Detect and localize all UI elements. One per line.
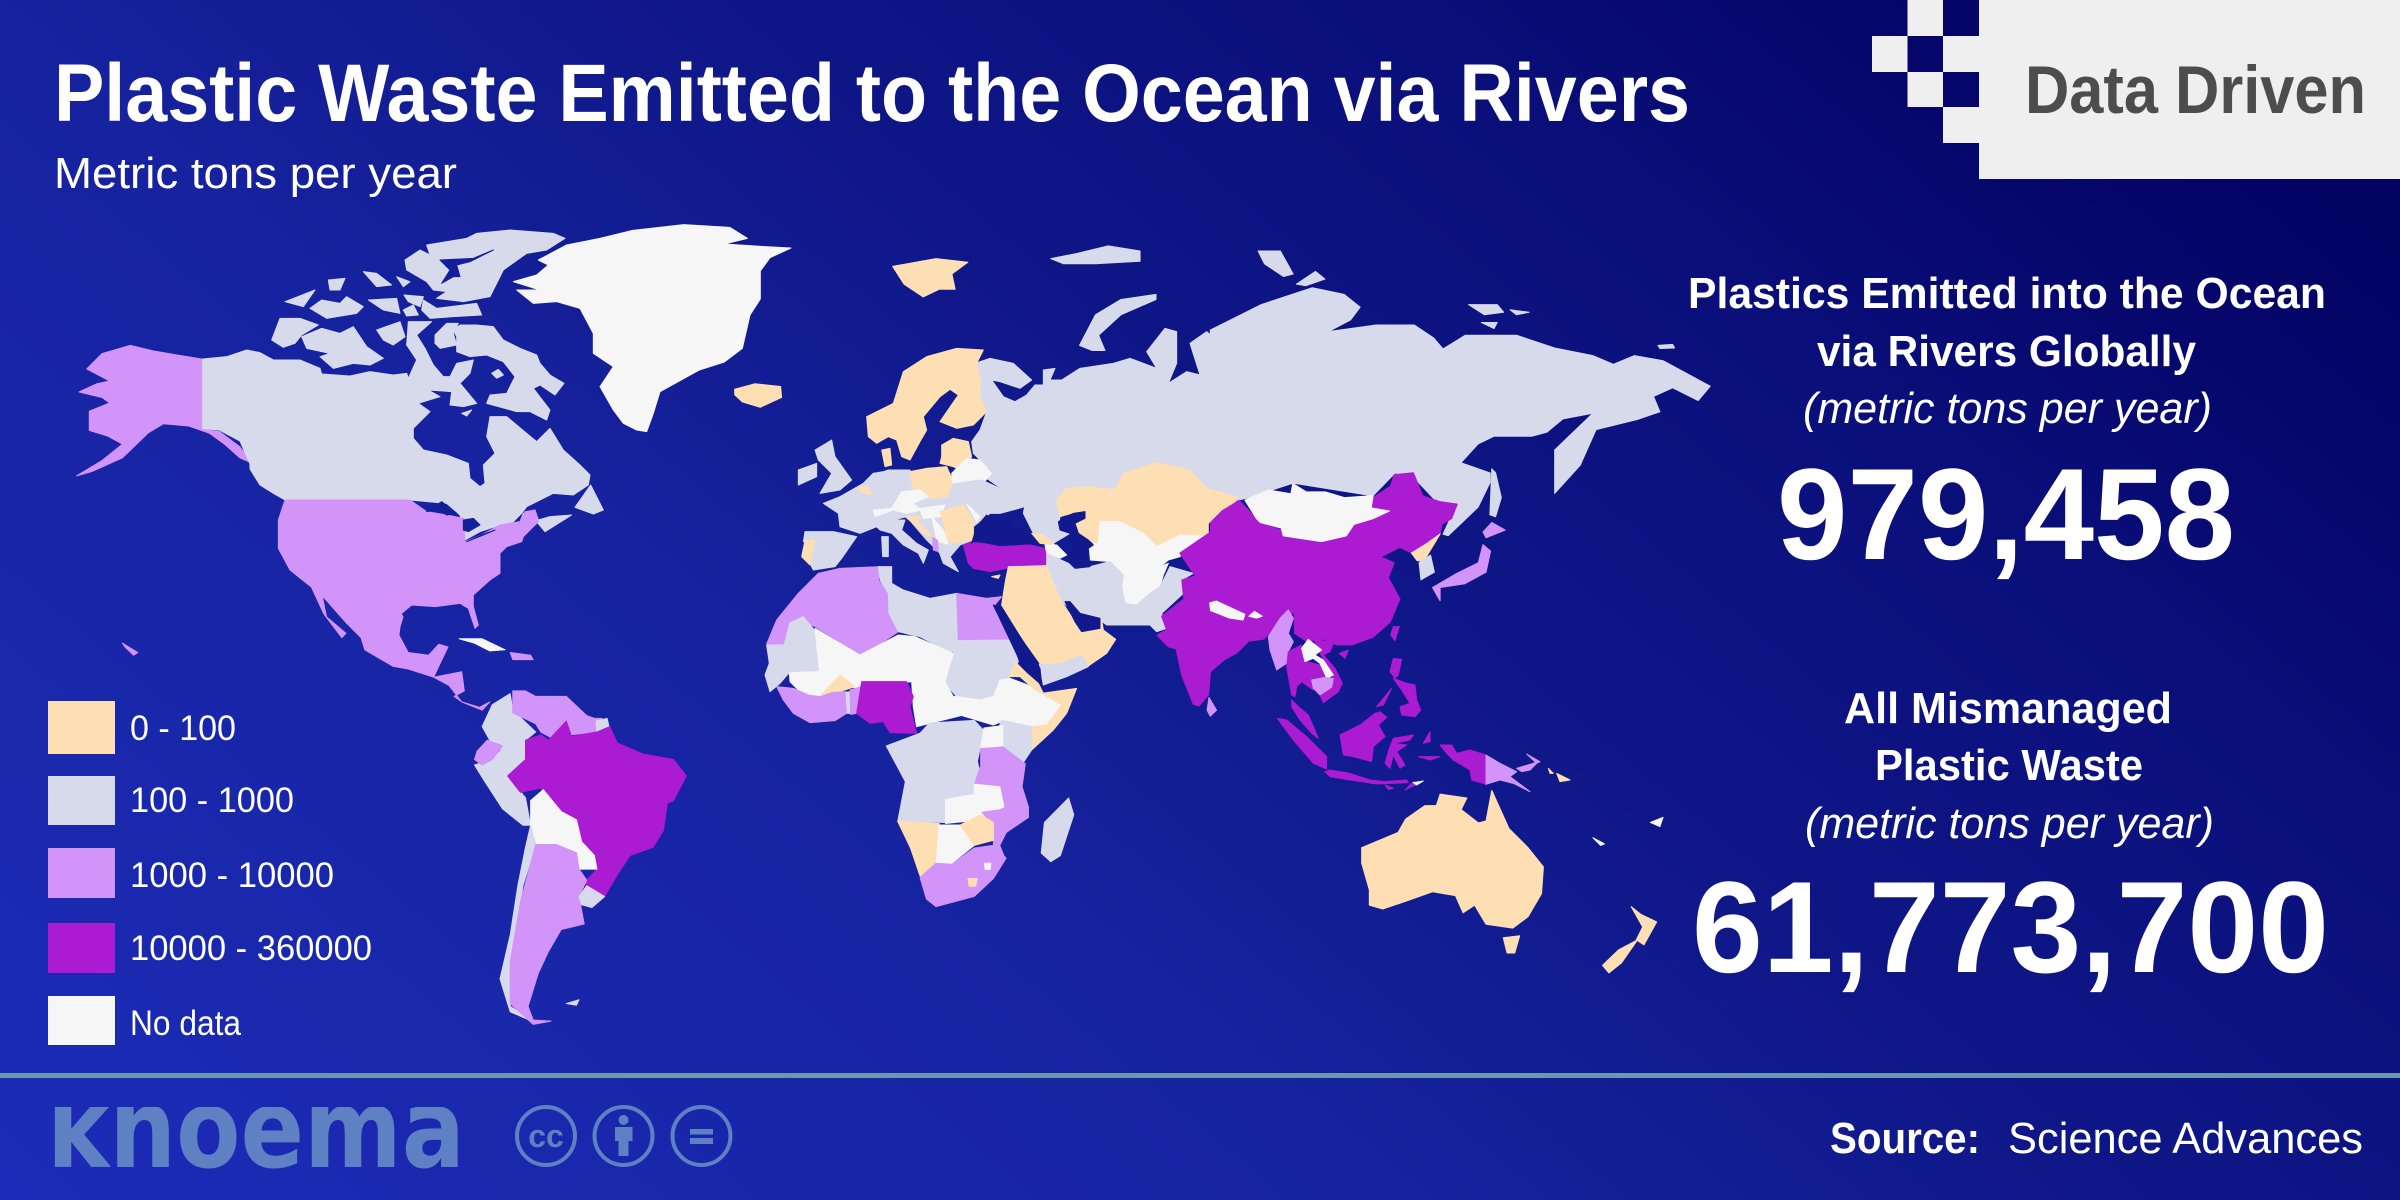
logo: knoema: knoema [47, 1065, 465, 1193]
stat block: plastics emitted via rivers: Plastics Emitted into the Ocean [1688, 269, 2326, 318]
map: East and South Asia and Australia [1157, 469, 1543, 953]
source credit: Science Advances [2008, 1114, 2363, 1163]
legend item: 100 - 1000 [48, 776, 294, 825]
stat block: plastics emitted via rivers: (metric tons per year) [1803, 384, 2212, 433]
brand tab: Data Driven: Data Driven [2025, 52, 2366, 128]
stat block: all mismanaged plastic waste: (metric tons per year) [1805, 799, 2214, 848]
legend item: 1000 - 10000 [48, 848, 334, 898]
map: Alaska, Mexico, Central and South America [77, 345, 782, 1024]
icon: no derivatives [672, 1107, 730, 1165]
legend item: 10000 - 360000: 10000 - 360000 [130, 929, 372, 968]
legend [48, 701, 372, 1045]
map: Russia and Arctic Asia [893, 246, 1710, 536]
map: Canada, USA and Greenland [203, 225, 791, 640]
subtitle: Metric tons per year [54, 149, 457, 198]
icon: attribution [594, 1107, 652, 1165]
stat block: plastics emitted via rivers: 979,458 [1777, 441, 2235, 587]
icon: creative commons: cc [528, 1118, 564, 1154]
stat block: plastics emitted via rivers [1688, 269, 2326, 587]
legend item: 0 - 100 [48, 701, 236, 754]
legend item: No data [48, 996, 241, 1045]
legend item: No data: No data [130, 1004, 241, 1043]
map: Europe, Middle East and North Africa [765, 310, 1260, 765]
stat block: all mismanaged plastic waste [1692, 684, 2329, 1000]
legend item: 1000 - 10000: 1000 - 10000 [130, 856, 334, 895]
world map [77, 225, 1710, 1024]
stat block: plastics emitted via rivers: via Rivers Globally [1817, 327, 2197, 376]
source credit [1830, 1114, 2363, 1163]
legend item: 10000 - 360000 [48, 923, 372, 973]
source credit: Source: [1830, 1114, 1980, 1163]
map: Southern Africa and Oceania islands [886, 697, 1663, 973]
stat block: all mismanaged plastic waste: Plastic Waste [1875, 741, 2143, 790]
map: Southeast Asia and Papua [1268, 610, 1570, 792]
brand tab: Data Driven [1872, 0, 2400, 179]
title: Plastic Waste Emitted to the Ocean via Rivers [54, 48, 1690, 139]
stat block: all mismanaged plastic waste: All Mismanaged [1844, 684, 2172, 733]
stat block: all mismanaged plastic waste: 61,773,700 [1692, 854, 2329, 1000]
legend item: 0 - 100: 0 - 100 [130, 709, 236, 748]
legend item: 100 - 1000: 100 - 1000 [130, 781, 294, 820]
icon: creative commons [517, 1107, 575, 1165]
